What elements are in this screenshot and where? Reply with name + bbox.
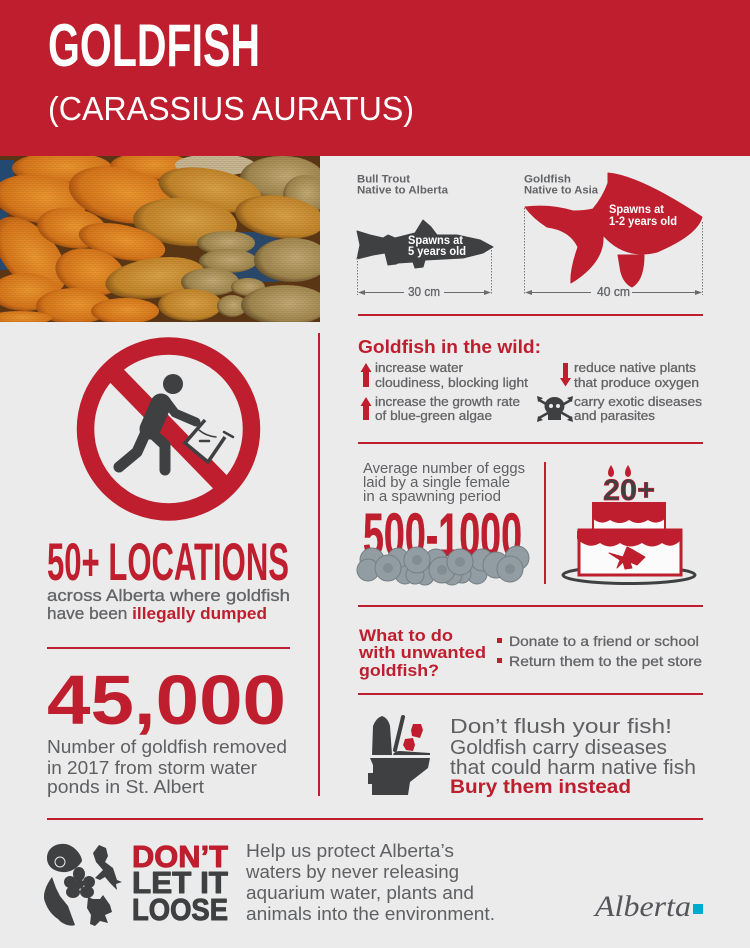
goldfish spawning label: 1-2 years old: [609, 216, 677, 228]
heading: Goldfish in the wild:: [358, 337, 541, 357]
icon: up arrow: [360, 397, 372, 420]
effect: cloudiness: cloudiness, blocking light: [375, 375, 528, 390]
stat: 45,000 goldfish removed: [47, 661, 287, 797]
panel: what to do with unwanted goldfish: [358, 626, 702, 680]
stat: 45,000 goldfish removed: ponds in St. Albert: [47, 776, 204, 797]
icon: bull trout silhouette: [357, 220, 493, 268]
effect: native plants: reduce native plants: [574, 360, 697, 375]
icon: no dumping sign: [86, 346, 252, 512]
goldfish 40 cm measure: 40 cm: [597, 285, 630, 299]
effect: diseases: carry exotic diseases: [574, 394, 703, 409]
title: GOLDFISH: [48, 12, 260, 79]
goldfish: [93, 845, 122, 890]
shell: [47, 844, 82, 872]
call to action: Help us protect Alberta’s: [246, 841, 454, 861]
bull trout label: Bull Trout: [357, 174, 410, 186]
goldfish label: Goldfish: [524, 174, 571, 186]
logo: don't let it loose: LOOSE: [132, 892, 228, 927]
effect: algae: increase the growth rate: [375, 394, 520, 409]
call to action: animals into the environment.: [246, 904, 495, 924]
icon: down arrow: [560, 363, 571, 386]
frog: [87, 895, 112, 926]
effect: diseases: and parasites: [574, 408, 656, 423]
stat: 50+ locations: across Alberta where goldfish: [47, 586, 290, 605]
trout 30 cm measure: [358, 250, 492, 299]
logo: don't let it loose: DON’T: [132, 839, 228, 874]
panel: fish size comparison: [357, 173, 702, 299]
koi: [44, 877, 75, 926]
big number: 500-1000: [363, 501, 522, 569]
panel: eggs per spawning: Average number of eggs: [363, 461, 525, 477]
panel: what to do with unwanted goldfish: What to do: [359, 626, 453, 645]
panel: eggs per spawning: laid by a single female: [363, 475, 510, 491]
icon: goldfish silhouette: [525, 173, 702, 283]
message: don't flush: Bury them instead: [450, 776, 631, 798]
goldfish label: Native to Asia: [524, 184, 599, 196]
effect: cloudiness: increase water: [375, 360, 464, 375]
panel: eggs per spawning: in a spawning period: [363, 489, 501, 505]
logo: don't let it loose: [132, 839, 228, 927]
stat: 50+ locations: have been illegally dumped: [47, 604, 267, 623]
photo: pile of goldfish: [0, 152, 330, 325]
icon: birthday cake 20+: 20+: [603, 474, 655, 507]
flower: [64, 867, 95, 898]
effect: algae: of blue-green algae: [375, 408, 492, 423]
icon: skull and crossbones: [537, 396, 573, 422]
call to action: aquarium water, plants and: [246, 883, 474, 903]
subtitle: (CARASSIUS AURATUS): [48, 90, 414, 127]
option: return: Return them to the pet store: [509, 653, 702, 669]
panel: what to do with unwanted goldfish: with unwanted: [358, 643, 486, 662]
call to action: waters by never releasing: [245, 862, 459, 882]
logo: Alberta: Alberta: [593, 890, 691, 923]
icon: toilet with fish: [368, 716, 430, 795]
icon: aquatic species group: [44, 844, 122, 926]
panel: goldfish in the wild: [358, 337, 703, 423]
stat: 45,000 goldfish removed: in 2017 from storm water: [47, 757, 257, 778]
trout spawning label: Spawns at: [408, 235, 463, 247]
stat: 50+ locations: 50+ LOCATIONS: [47, 533, 289, 592]
stat: 45,000 goldfish removed: Number of goldfish removed: [47, 736, 287, 757]
panel: what to do with unwanted goldfish: goldfish?: [359, 661, 439, 680]
goldfish 40 cm measure: [524, 208, 702, 299]
option: donate: Donate to a friend or school: [509, 633, 699, 649]
goldfish spawning label: Spawns at: [609, 204, 664, 216]
message: don't flush: that could harm native fish: [450, 756, 696, 779]
bull trout label: Native to Alberta: [357, 184, 449, 196]
icon: birthday cake 20+: [563, 465, 695, 584]
icon: eggs: [357, 546, 529, 585]
panel: eggs per spawning: [357, 461, 529, 585]
message: don't flush: Goldfish carry diseases: [450, 736, 667, 759]
logo: don't let it loose: LET IT: [132, 865, 228, 900]
stat: 50+ locations: [47, 533, 290, 623]
message: don't flush: [450, 715, 696, 798]
trout spawning label: 5 years old: [408, 246, 466, 258]
trout 30 cm measure: 30 cm: [408, 285, 440, 299]
person dumping: [119, 374, 233, 470]
message: don't flush: Don’t flush your fish!: [450, 715, 672, 738]
stat: 45,000 goldfish removed: 45,000: [47, 661, 286, 739]
icon: up arrow: [360, 363, 372, 387]
title banner: [0, 0, 750, 156]
effect: native plants: that produce oxygen: [574, 375, 699, 390]
